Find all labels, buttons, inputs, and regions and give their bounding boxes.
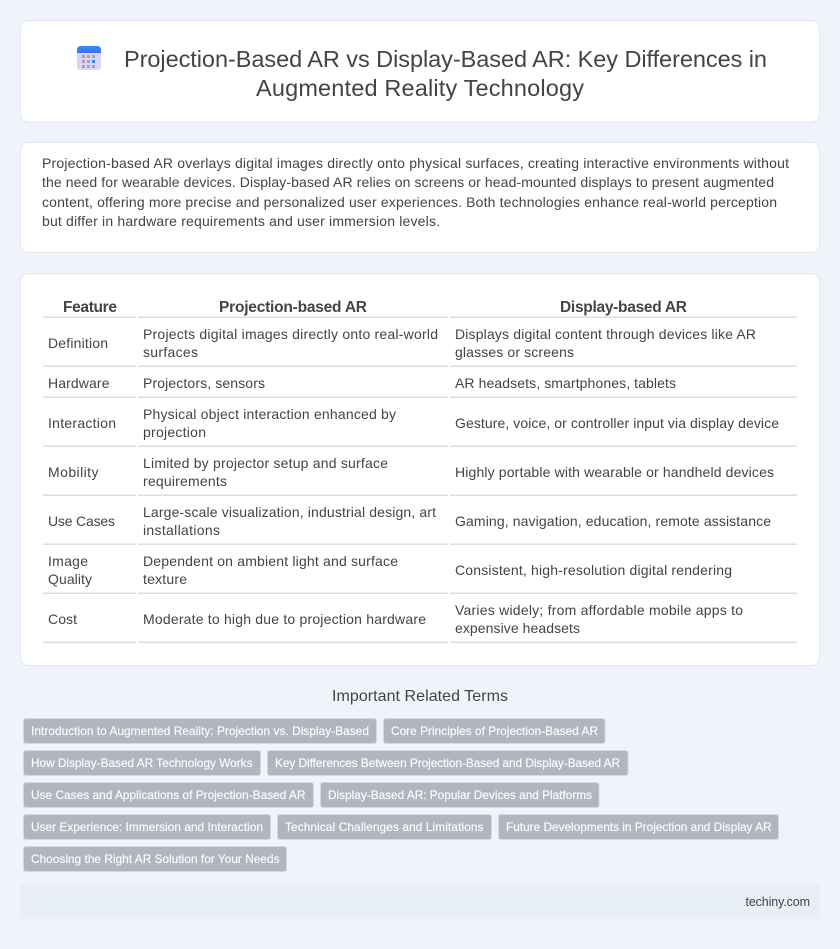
table row: interaction: Physical object interaction enhanced by <box>143 406 396 422</box>
title: Augmented Reality Technology <box>256 75 584 101</box>
tag <box>24 846 286 872</box>
table row: use cases: Use Cases <box>48 513 115 529</box>
table header row: Display-based AR <box>560 299 687 316</box>
footer <box>20 885 820 919</box>
text block: introduction paragraph: but differ in hardware requirements and user immersion levels. <box>42 213 440 229</box>
tag: User Experience: Immersion and Interaction <box>31 820 263 834</box>
tag: Choosing the Right AR Solution for Your Needs <box>31 852 280 866</box>
text block: introduction paragraph: Projection-based AR overlays digital images directly onto physical surfaces, creating interactive environments without <box>42 155 789 171</box>
tag <box>268 750 628 776</box>
icon: calendar <box>77 46 101 70</box>
table row: cost: Moderate to high due to projection hardware <box>143 611 426 627</box>
table row: cost: expensive headsets <box>455 620 580 636</box>
table row: interaction: Interaction <box>48 415 116 431</box>
table row: use cases: Large-scale visualization, industrial design, art <box>143 504 436 520</box>
table row: mobility: requirements <box>143 473 227 489</box>
tag list: related terms <box>24 718 778 872</box>
tag: Future Developments in Projection and Display AR <box>506 820 772 834</box>
tag: Key Differences Between Projection-Based and Display-Based AR <box>275 756 620 770</box>
tag: Display-Based AR: Popular Devices and Platforms <box>328 788 592 802</box>
table row: interaction: Gesture, voice, or controller input via display device <box>455 415 779 431</box>
table row: cost <box>43 602 797 643</box>
tag <box>24 750 260 776</box>
table row: use cases: Gaming, navigation, education, remote assistance <box>455 513 771 529</box>
table row: definition: Projects digital images directly onto real-world <box>143 326 438 342</box>
title <box>124 46 767 101</box>
panel: introduction <box>20 142 820 252</box>
tag: Use Cases and Applications of Projection-Based AR <box>31 788 306 802</box>
table row: definition <box>43 326 797 367</box>
table header row: Projection-based AR <box>219 299 367 316</box>
tag <box>24 782 314 808</box>
heading: important related terms: Important Related Terms <box>332 688 508 705</box>
tag <box>320 782 599 808</box>
table row: interaction: projection <box>143 424 206 440</box>
table row: mobility: Limited by projector setup and surface <box>143 455 388 471</box>
tag <box>498 814 778 840</box>
tag: Core Principles of Projection-Based AR <box>391 724 598 738</box>
table row: image quality <box>43 553 797 594</box>
table row: definition: glasses or screens <box>455 344 574 360</box>
text block: introduction paragraph <box>42 155 789 229</box>
title: Projection-Based AR vs Display-Based AR: Key Differences in <box>124 46 767 72</box>
tag: Technical Challenges and Limitations <box>285 820 484 834</box>
footer site name: techiny.com <box>746 895 810 909</box>
tag <box>24 718 376 744</box>
tag <box>278 814 492 840</box>
tag: Introduction to Augmented Reality: Projection vs. Display-Based <box>31 724 369 738</box>
table row: mobility: Mobility <box>48 464 98 480</box>
table row: definition: surfaces <box>143 344 198 360</box>
text block: introduction paragraph: the need for wearable devices. Display-based AR relies on screens or head-mounted displays to present augmented <box>42 174 774 190</box>
table row: image quality: Consistent, high-resolution digital rendering <box>455 562 732 578</box>
text block: introduction paragraph: content, offering more precise and personalized user experiences. Both technologies enhance real-world perception <box>42 194 777 210</box>
tag: How Display-Based AR Technology Works <box>31 756 253 770</box>
table header row: Feature <box>63 299 117 316</box>
table row: use cases: installations <box>143 522 220 538</box>
table row: definition: Displays digital content through devices like AR <box>455 326 756 342</box>
tag <box>384 718 605 744</box>
table header row <box>43 299 797 318</box>
table row: image quality: Quality <box>48 571 92 587</box>
panel: header <box>20 20 820 122</box>
table row: definition: Definition <box>48 335 108 351</box>
table row: use cases <box>43 504 797 545</box>
table row: hardware: Hardware <box>48 375 110 391</box>
table row: image quality: texture <box>143 571 187 587</box>
table row: mobility <box>43 455 797 496</box>
table row: cost: Varies widely; from affordable mobile apps to <box>455 602 743 618</box>
table row: image quality: Dependent on ambient light and surface <box>143 553 398 569</box>
table row: hardware: AR headsets, smartphones, tablets <box>455 375 676 391</box>
table row: image quality: Image <box>48 553 88 569</box>
panel: comparison table <box>20 274 820 666</box>
table row: cost: Cost <box>48 611 77 627</box>
table row: hardware <box>43 375 797 398</box>
tag <box>24 814 270 840</box>
table row: mobility: Highly portable with wearable or handheld devices <box>455 464 774 480</box>
table row: hardware: Projectors, sensors <box>143 375 265 391</box>
table row: interaction <box>43 406 797 447</box>
